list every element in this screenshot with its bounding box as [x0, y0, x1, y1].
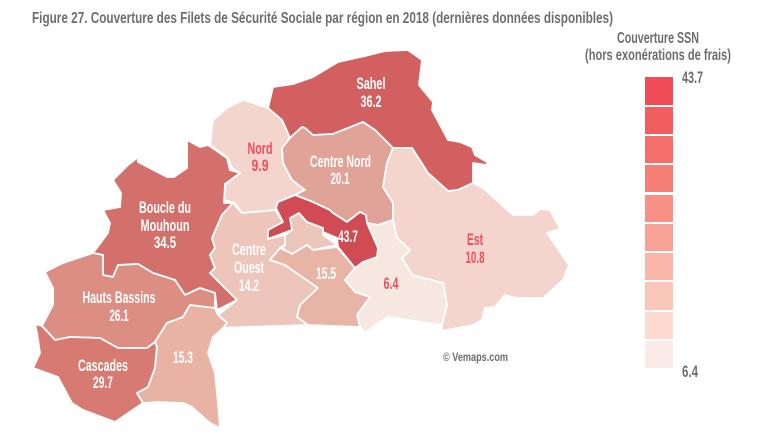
- region: Centre Nord: Centre Nord: [310, 152, 371, 171]
- region: Plateau Central: 43.7: [338, 227, 358, 246]
- region: Centre (small): [282, 213, 337, 254]
- region: Boucle du Mouhoun: Boucle du: [139, 198, 191, 217]
- region: Boucle du Mouhoun: [93, 140, 240, 310]
- region: Boucle du Mouhoun: Mouhoun: [140, 216, 190, 235]
- legend title: Couverture SSN: [617, 30, 699, 47]
- region: Sud-Ouest: [137, 305, 227, 428]
- region: Centre Ouest: Ouest: [234, 258, 264, 277]
- region: Centre Sud: [270, 245, 370, 327]
- region: Sud-Ouest: 15.3: [173, 348, 193, 367]
- region: Boucle du Mouhoun: 34.5: [154, 233, 176, 252]
- region: Cascades: 29.7: [93, 373, 113, 392]
- region: Sahel: [268, 50, 487, 191]
- legend colour scale: [645, 77, 673, 368]
- region: Plateau Central: [268, 195, 378, 268]
- region: Centre Sud: 15.5: [316, 264, 336, 283]
- region: Hauts Bassins: 26.1: [110, 306, 128, 325]
- map: Burkina Faso regions: [33, 50, 569, 428]
- region: Est: 10.8: [466, 248, 484, 267]
- region: Nord: 9.9: [252, 156, 268, 175]
- region: Centre Ouest: Centre: [232, 240, 266, 259]
- legend maximum: 43.7: [682, 69, 703, 87]
- region: Cascades: [33, 324, 157, 422]
- region: Centre Nord: 20.1: [330, 169, 350, 188]
- region: Nord: [210, 100, 305, 213]
- legend title: [585, 30, 731, 64]
- map credit: © Vemaps.com: [443, 350, 508, 364]
- region: Centre Nord: [282, 122, 393, 225]
- region: Hauts Bassins: Hauts Bassins: [82, 288, 156, 307]
- region: Sahel: Sahel: [356, 74, 386, 93]
- region: Centre Est: 6.4: [384, 274, 399, 293]
- region: Hauts Bassins: [42, 253, 215, 348]
- region: Centre Ouest: [210, 203, 318, 328]
- region: Est: [383, 148, 569, 331]
- region: Cascades: Cascades: [78, 356, 128, 375]
- region: Est: Est: [467, 230, 483, 249]
- legend minimum: 6.4: [682, 363, 699, 381]
- region: Centre Est: [345, 220, 447, 333]
- region: Centre Ouest: 14.2: [239, 276, 259, 295]
- region: Sahel: 36.2: [360, 92, 382, 111]
- region: Nord: Nord: [248, 139, 272, 158]
